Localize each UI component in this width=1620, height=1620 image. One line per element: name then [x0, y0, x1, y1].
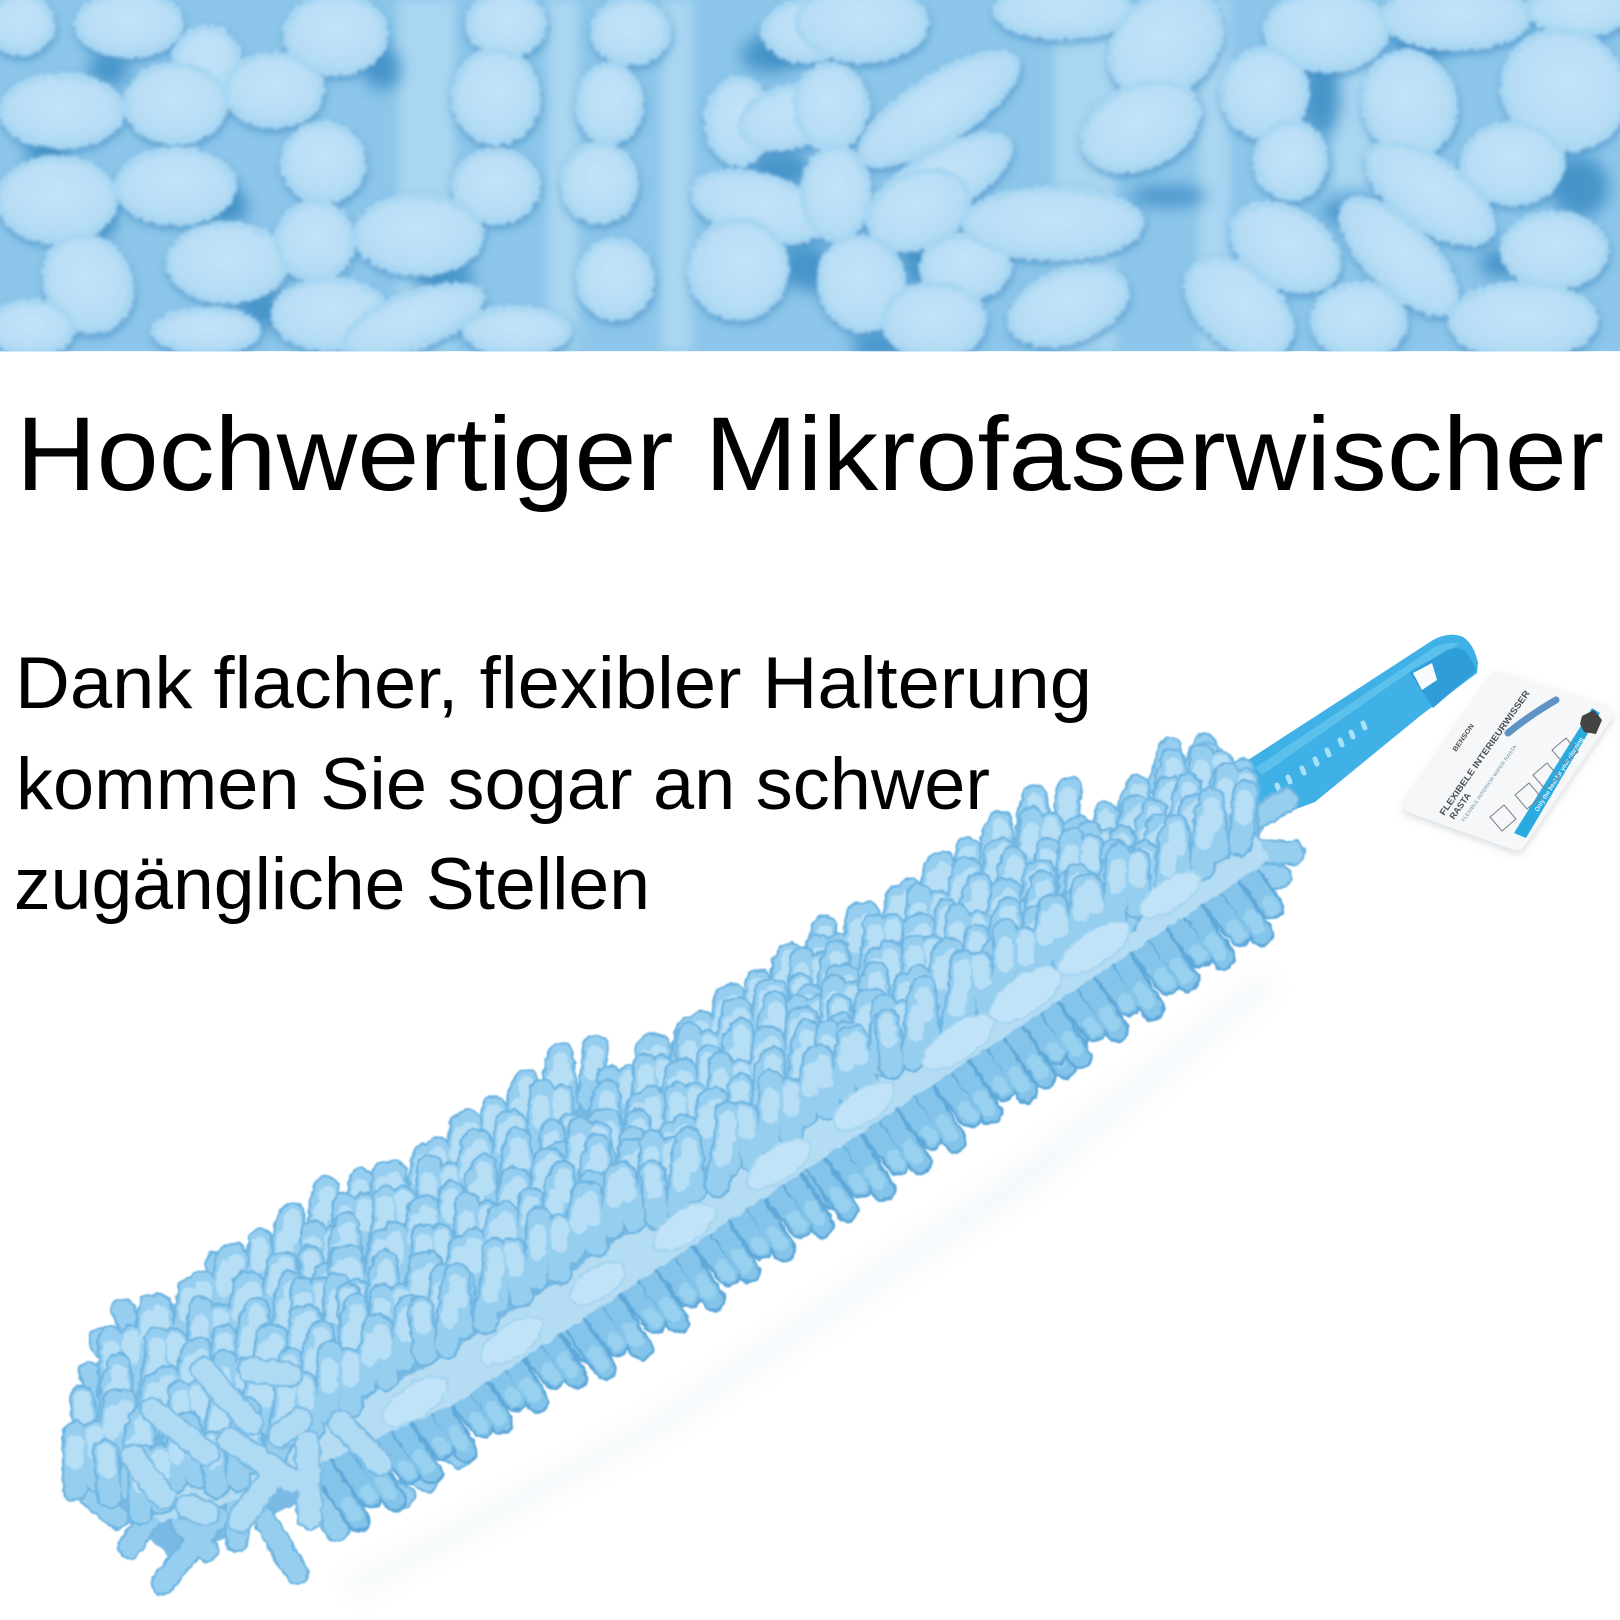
text block: description: Dank flacher, flexibler Halterung — [15, 643, 1092, 724]
fabric strips — [398, 0, 1374, 351]
text block: description: zugängliche Stellen — [14, 844, 650, 925]
tag subheading: RASTA — [1447, 790, 1473, 821]
tag strip text: Only the best for your cleaning — [1534, 736, 1585, 813]
body base mass — [98, 775, 1266, 1560]
handle hole — [1410, 648, 1477, 708]
flat pale strands on spine — [375, 859, 1211, 1442]
handle — [1245, 635, 1478, 815]
text block: description: kommen Sie sogar an schwer — [16, 744, 990, 825]
tag small text: FLEXIBLE INTERIOR WIPER RASTA — [1461, 744, 1519, 823]
hang tag — [1403, 671, 1613, 851]
duster body — [15, 635, 1322, 1620]
title: Hochwertiger Mikrofaserwischer — [16, 396, 1604, 513]
tag heading: FLEXIBELE INTERIEURWISSER — [1437, 688, 1532, 817]
floor shadow — [340, 970, 1280, 1600]
handle ribs — [1277, 723, 1365, 790]
dark crevices — [26, 25, 1609, 361]
text block: description — [14, 643, 1092, 925]
fabric spine — [128, 766, 1271, 1587]
tag care icons — [1490, 738, 1578, 831]
panel: microfiber close-up band — [0, 0, 1620, 374]
product: microfiber duster — [15, 635, 1613, 1620]
chenille tufts — [0, 0, 1620, 374]
tag badge — [1580, 710, 1602, 734]
tip and handle-end lower strands — [83, 745, 1293, 1583]
upper strand rows — [15, 635, 1273, 1586]
tag blue strip — [1514, 708, 1600, 838]
tag logo: BENSON — [1452, 723, 1476, 753]
lower fringe strands — [322, 851, 1282, 1537]
tag mini duster icon — [1508, 700, 1556, 733]
strands in duster frame — [15, 635, 1322, 1620]
tip front strands — [133, 1370, 380, 1520]
